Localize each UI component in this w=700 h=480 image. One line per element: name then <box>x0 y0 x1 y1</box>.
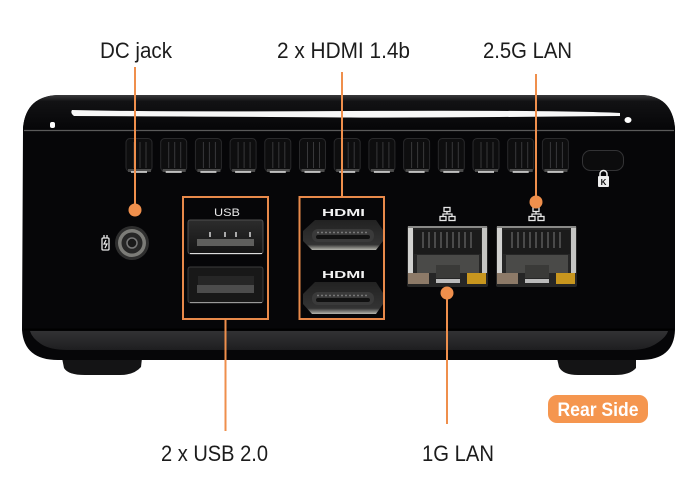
leader: 1G LAN <box>440 286 454 424</box>
label: 2 x USB 2.0: 2 x USB 2.0 <box>161 441 268 466</box>
glossy top edge <box>23 95 675 130</box>
ventilation slots <box>126 138 568 172</box>
icon: power <box>102 235 109 250</box>
upper HDMI port <box>303 220 383 250</box>
badge: Rear Side <box>548 395 648 423</box>
Kensington lock slot <box>582 150 624 187</box>
device body <box>22 95 675 360</box>
feet <box>62 358 636 375</box>
upper USB port <box>188 220 263 254</box>
leader: USB <box>224 319 226 431</box>
LAN port 2.5G <box>496 226 577 287</box>
lower HDMI port <box>303 282 383 314</box>
corner glints <box>50 117 632 128</box>
HDMI highlight box <box>300 197 384 319</box>
label: 2 x HDMI 1.4b: 2 x HDMI 1.4b <box>277 38 410 63</box>
top highlight <box>71 110 620 118</box>
icon: network right <box>529 208 544 220</box>
ridge line <box>24 130 674 132</box>
leader: HDMI <box>341 72 343 197</box>
leader: DC jack <box>128 67 142 216</box>
label: 1G LAN: 1G LAN <box>422 441 494 466</box>
HDMI label upper: HDMI <box>322 208 365 219</box>
USB ports <box>188 207 263 303</box>
DC jack port <box>102 226 149 260</box>
badge: Rear Side: Rear Side <box>558 400 638 421</box>
Kensington lock slot: K <box>601 178 607 187</box>
HDMI label lower: HDMI <box>322 270 365 281</box>
leader: 2.5G LAN <box>530 74 542 208</box>
label: 2.5G LAN: 2.5G LAN <box>483 38 572 63</box>
lower USB port <box>188 267 263 303</box>
LAN port 1G <box>407 226 488 287</box>
HDMI ports <box>303 208 383 314</box>
bottom band <box>30 331 668 350</box>
USB label: USB <box>214 207 240 219</box>
USB highlight box <box>183 197 268 319</box>
icon: network left <box>440 208 455 220</box>
label: DC jack: DC jack <box>100 38 173 63</box>
